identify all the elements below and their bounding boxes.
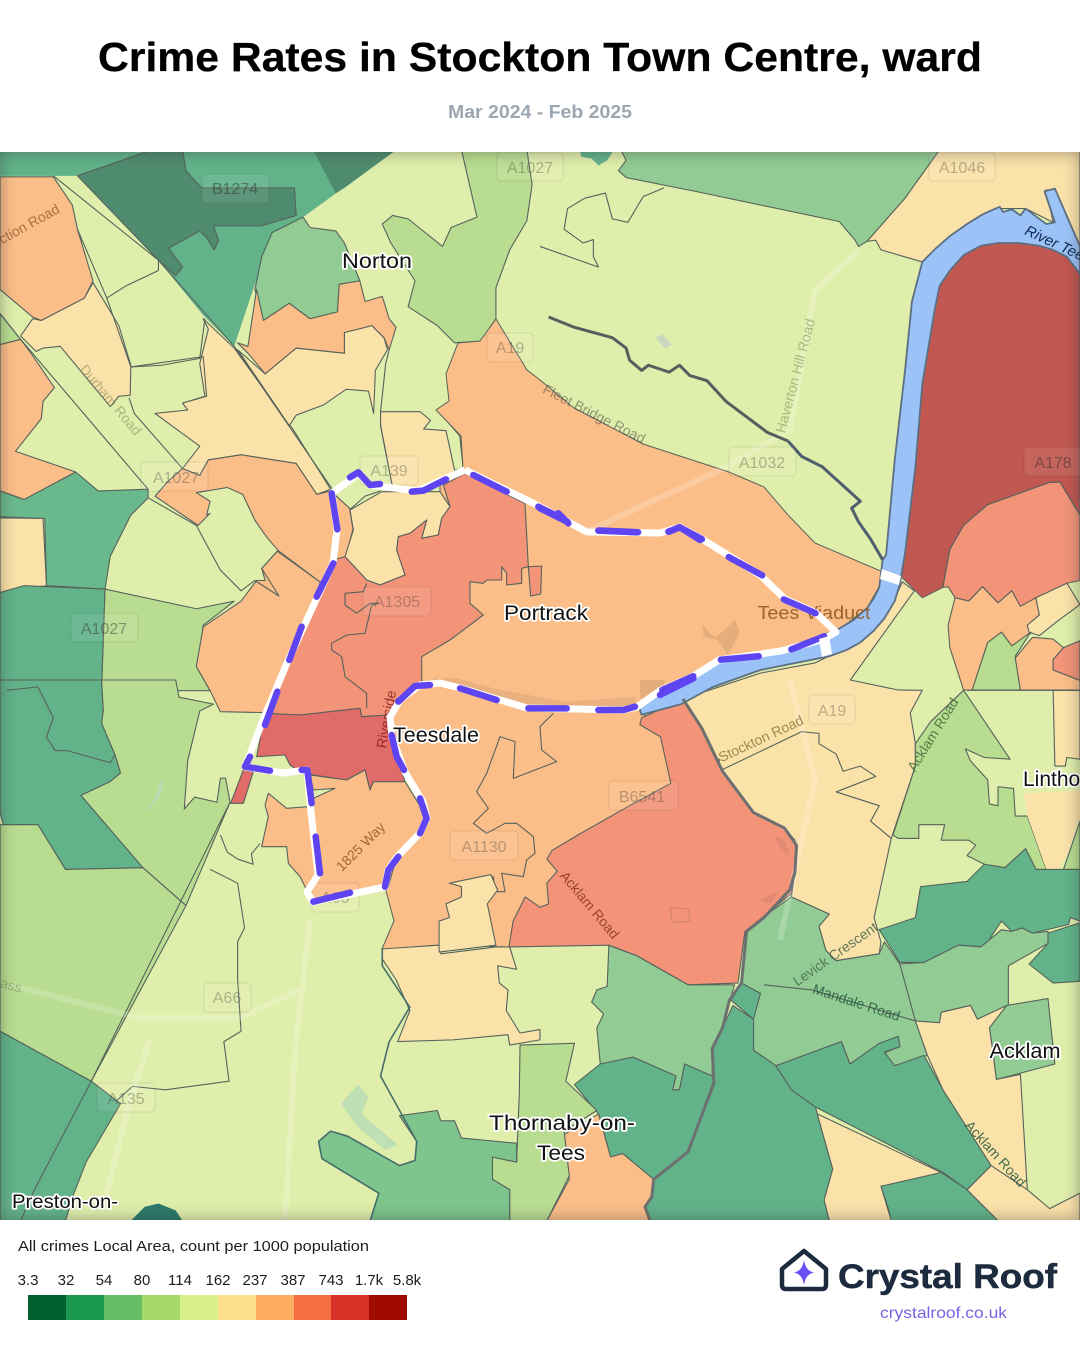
street name labels: Riverside bbox=[373, 689, 399, 749]
place names: Teesdale bbox=[393, 724, 479, 747]
road labels: A1032 bbox=[739, 455, 785, 472]
south-west yellow inlet in orange bbox=[439, 875, 498, 952]
ward boundary: white outline bbox=[245, 470, 836, 902]
street name labels: Tees Viaduct bbox=[758, 603, 870, 623]
road labels: A139 bbox=[370, 463, 408, 480]
road labels: A1305 bbox=[374, 594, 420, 611]
street name labels: Haverton Hill Road bbox=[772, 317, 818, 435]
road labels: A19 bbox=[818, 703, 846, 720]
white bridge marks on river bbox=[819, 569, 901, 657]
website url: crystalroof.co.uk bbox=[880, 1305, 1008, 1322]
street name labels: Durham Road bbox=[77, 361, 145, 438]
street name labels: Acklam Road bbox=[904, 695, 962, 774]
street name labels: Levick Crescent bbox=[790, 919, 881, 989]
logo: Crystal Roof bbox=[780, 1248, 1058, 1322]
wards: south-east salmon area bbox=[509, 699, 797, 985]
place names: Norton bbox=[342, 250, 412, 273]
street name labels: Mandale Road bbox=[811, 981, 902, 1024]
legend value labels: 1.7k bbox=[355, 1272, 384, 1289]
road labels: A135 bbox=[107, 1091, 145, 1108]
road labels: A1027 bbox=[507, 160, 553, 177]
road labels: A1027 bbox=[153, 470, 199, 487]
legend value labels: 114 bbox=[168, 1272, 192, 1289]
ward boundary: purple dashes north-east bbox=[540, 508, 824, 690]
legend colour scale bbox=[28, 1295, 407, 1320]
legend value labels: 5.8k bbox=[393, 1272, 422, 1289]
ward boundary: purple dashes west and south bbox=[245, 472, 700, 902]
place names: Acklam bbox=[990, 1040, 1060, 1063]
wards: north-west quadrant bbox=[0, 150, 532, 713]
road labels: A1046 bbox=[939, 160, 985, 177]
road labels: B1274 bbox=[212, 181, 258, 198]
road labels: A1027 bbox=[81, 621, 127, 638]
place names: Preston-on- bbox=[12, 1192, 118, 1213]
stream: Billingham Beck bbox=[549, 317, 788, 441]
stream: lower channel bbox=[788, 441, 883, 560]
place names: Portrack bbox=[504, 602, 589, 625]
street name labels: Acklam Road bbox=[962, 1117, 1030, 1190]
legend value labels: 3.3 bbox=[18, 1272, 38, 1289]
legend value labels: 162 bbox=[205, 1272, 231, 1289]
wards: south-east quadrant bbox=[492, 582, 1080, 1221]
base land area bbox=[0, 152, 1080, 1220]
panel: choropleth map bbox=[0, 152, 1080, 1220]
brand name: Crystal Roof bbox=[838, 1258, 1058, 1296]
wards: north-east quadrant bbox=[540, 150, 1080, 690]
street name labels: Acklam Road bbox=[557, 868, 623, 942]
eastern ward boundary, thick bbox=[645, 699, 797, 1221]
wards: central high-crime area bbox=[231, 473, 637, 902]
title bbox=[98, 34, 982, 122]
legend value labels: 80 bbox=[134, 1272, 150, 1289]
street name labels: 1825 Way bbox=[333, 819, 388, 874]
legend value labels: 54 bbox=[96, 1272, 112, 1289]
road labels bbox=[71, 152, 1080, 1112]
river Tees bbox=[549, 189, 1080, 715]
legend title: All crimes Local Area, count per 1000 population bbox=[18, 1239, 369, 1255]
road labels: A66 bbox=[213, 990, 241, 1007]
legend value labels: 743 bbox=[318, 1272, 344, 1289]
wards: Portrack and Teesdale orange area bbox=[382, 319, 883, 949]
place names: Thornaby-on- bbox=[489, 1112, 635, 1135]
legend value labels: 237 bbox=[242, 1272, 268, 1289]
map edge vignette bbox=[0, 152, 1080, 1220]
faint road network bbox=[10, 250, 860, 1220]
road labels: A1130 bbox=[461, 839, 507, 856]
legend bbox=[18, 1239, 422, 1320]
street name labels: Fleet Bridge Road bbox=[540, 381, 648, 446]
street name labels bbox=[0, 201, 1080, 1190]
icon: house with sparkle bbox=[782, 1251, 826, 1289]
road labels: A66 bbox=[321, 890, 349, 907]
legend value labels: 387 bbox=[280, 1272, 306, 1289]
road labels: A178 bbox=[1034, 455, 1072, 472]
subtitle: date range: Mar 2024 - Feb 2025 bbox=[448, 102, 632, 122]
street name labels: Stockton Road bbox=[716, 712, 806, 765]
grey industrial patches in Portrack bbox=[640, 620, 740, 700]
place names: Tees bbox=[537, 1142, 585, 1165]
title: Crime Rates in Stockton Town Centre, ward bbox=[98, 34, 982, 80]
wards: south-west quadrant bbox=[0, 680, 540, 1221]
legend value labels bbox=[18, 1272, 422, 1289]
road labels: B6541 bbox=[619, 789, 665, 806]
legend value labels: 32 bbox=[58, 1272, 74, 1289]
road labels: A19 bbox=[496, 340, 524, 357]
place names bbox=[12, 250, 1080, 1213]
